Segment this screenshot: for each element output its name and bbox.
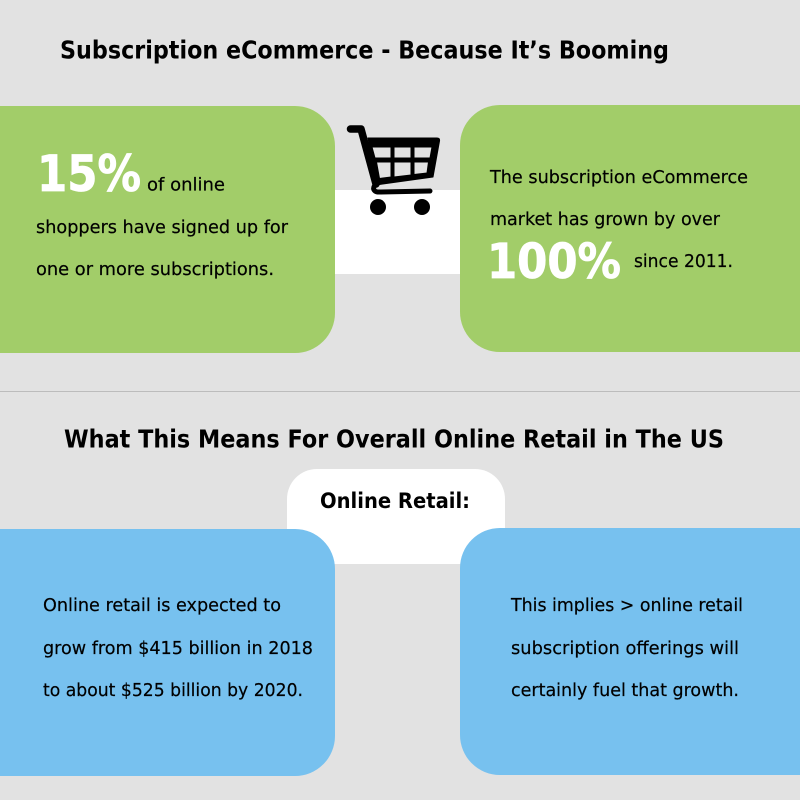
panel: implication: [460, 528, 800, 775]
panel: online retail label: [287, 469, 505, 564]
text: forecast: grow from $415 billion in 2018: [43, 638, 313, 659]
text: forecast: [43, 595, 313, 701]
panel: 15% stat: [0, 106, 335, 353]
stat: 100%: 100%: [487, 234, 621, 290]
heading: online retail section: What This Means For Overall Online Retail in The US: [64, 424, 724, 454]
stat: 15%: 15%: [37, 145, 141, 203]
text: market growth: since 2011.: [634, 251, 733, 272]
text: market growth: The subscription eCommerce: [489, 167, 748, 188]
icon: shopping cart: [350, 129, 440, 215]
panel: online retail forecast: [0, 529, 335, 776]
text: 15% description: one or more subscriptions.: [36, 259, 274, 280]
title: Subscription eCommerce - Because It’s Booming: [60, 36, 669, 64]
text: implication: [510, 595, 743, 701]
text: forecast: to about $525 billion by 2020.: [43, 680, 303, 701]
label: online retail: Online Retail:: [320, 489, 470, 513]
text: 15% description: shoppers have signed up for: [36, 217, 289, 238]
text: implication: This implies > online retail: [510, 595, 743, 616]
panel: 100% stat: [460, 105, 800, 352]
text: implication: subscription offerings will: [511, 638, 739, 659]
divider: [0, 391, 800, 392]
text: market growth: market has grown by over: [490, 209, 721, 230]
text: forecast: Online retail is expected to: [43, 595, 281, 616]
text: 15% description: of online: [147, 174, 225, 196]
text: market growth: [489, 167, 748, 272]
text: implication: certainly fuel that growth.: [511, 680, 739, 701]
white connector band: [330, 190, 465, 274]
text: 15% description: [36, 174, 289, 280]
